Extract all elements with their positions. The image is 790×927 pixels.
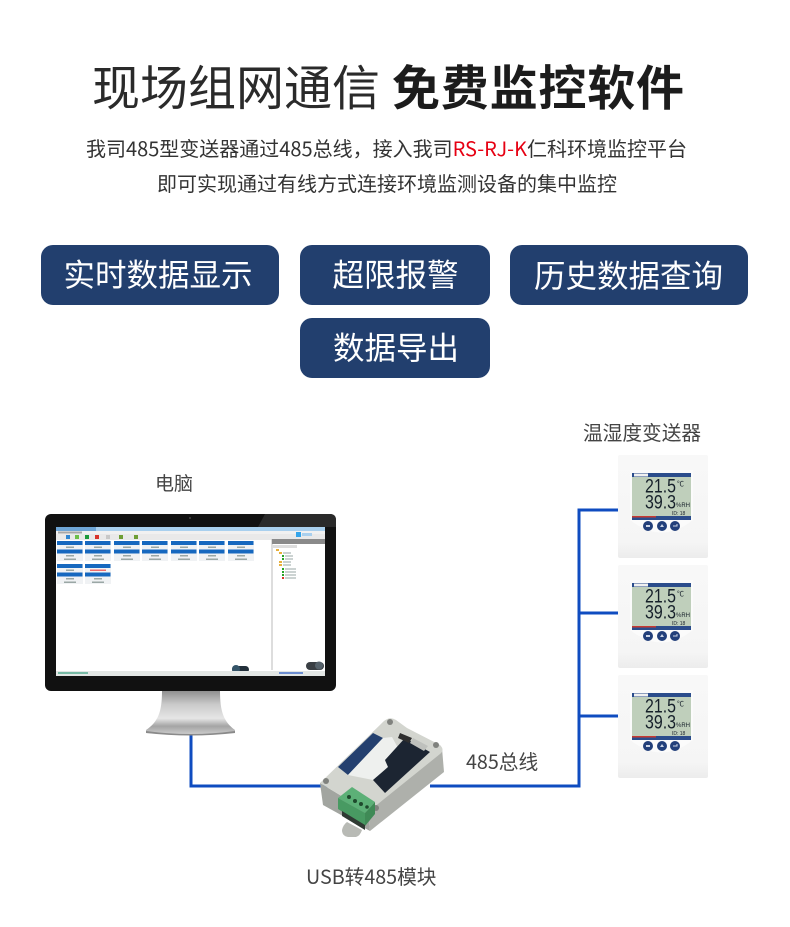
sensor 2: 21.5	[645, 586, 676, 608]
sensor label: 温湿度变送器	[583, 417, 701, 446]
sensor 1: ℃	[677, 480, 684, 488]
sensor 2: ID: 18	[672, 621, 686, 627]
title: 现场组网通信	[92, 49, 380, 119]
mounting ear	[342, 822, 362, 837]
sensor 1: 21.5	[645, 476, 676, 498]
title: 免费监控软件	[392, 49, 684, 119]
label: 485总线: 485总线	[466, 746, 538, 775]
USB to 485 module	[320, 718, 444, 837]
sensor 2: %RH	[676, 613, 690, 619]
feature button: 超限报警: 超限报警	[332, 250, 459, 296]
sensor 3: ID: 18	[672, 731, 686, 737]
intro text: 即可实现通过有线方式连接环境监测设备的集中监控	[157, 168, 617, 197]
sensor 3: 21.5	[645, 696, 676, 718]
title	[92, 49, 684, 119]
intro text: 我司485型变送器通过485总线，接入我司RS-RJ-K仁科环境监控平台	[86, 133, 687, 162]
sensor 2: ℃	[677, 590, 684, 598]
sensor 2: 39.3	[645, 602, 676, 624]
device tree panel	[272, 539, 325, 670]
feature button: 实时数据显示	[41, 245, 279, 305]
feature button: 数据导出	[300, 318, 490, 378]
label: 电脑: 电脑	[155, 469, 193, 496]
connection lines: 485 bus	[191, 510, 618, 786]
sensor 1: 39.3	[645, 492, 676, 514]
monitor stand	[146, 691, 235, 736]
feature button: 数据导出: 数据导出	[333, 323, 459, 369]
module top face	[320, 718, 442, 812]
feature button: 历史数据查询	[510, 245, 748, 305]
sensor 2	[618, 565, 708, 668]
feature button: 实时数据显示: 实时数据显示	[63, 250, 253, 296]
sensor 1	[618, 455, 708, 558]
module right side	[368, 748, 444, 831]
device cards	[57, 541, 254, 584]
module front side	[320, 783, 370, 831]
sensor 1: ID: 18	[672, 511, 686, 517]
monitor bezel	[45, 514, 336, 691]
status bar	[56, 671, 325, 676]
sensor 1: %RH	[676, 503, 690, 509]
module label panels	[338, 733, 430, 793]
intro text	[86, 133, 687, 197]
sensor 3: ℃	[677, 700, 684, 708]
feature button: 历史数据查询: 历史数据查询	[534, 251, 723, 297]
floating badges	[232, 662, 324, 673]
feature button: 超限报警	[300, 245, 490, 305]
sensor 3: 39.3	[645, 712, 676, 734]
green terminal block	[338, 787, 375, 830]
icon: computer monitor	[45, 514, 336, 736]
sensor 3: %RH	[676, 723, 690, 729]
sensor 3	[618, 675, 708, 778]
screen: monitoring software	[56, 527, 325, 676]
label: USB转485模块: USB转485模块	[306, 861, 437, 890]
